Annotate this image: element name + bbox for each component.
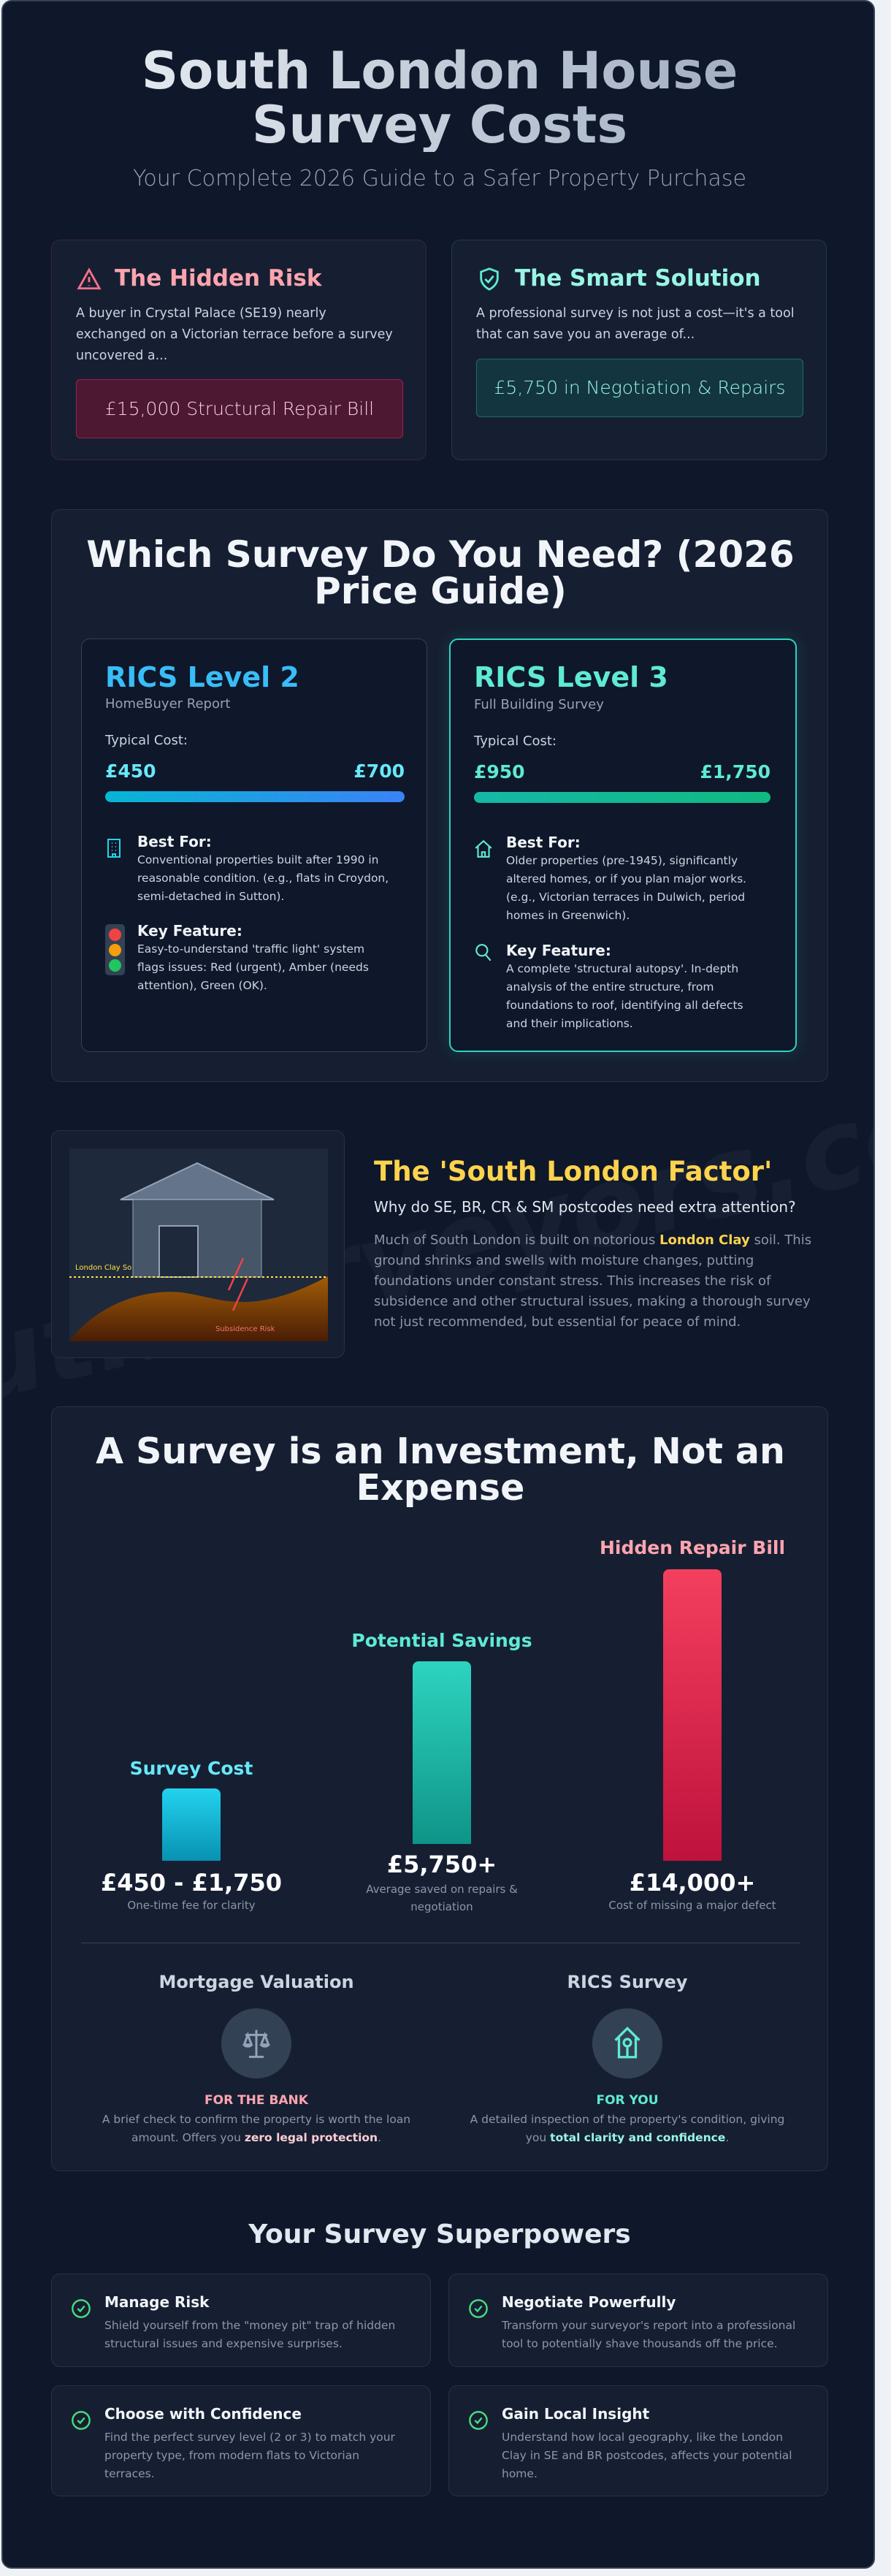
bar: hidden repair bill: £14,000+ [630, 1869, 755, 1897]
bar: survey cost [101, 1758, 282, 1912]
heading: investment [96, 1430, 785, 1509]
icon: house [475, 840, 492, 858]
bar: hidden repair bill: Hidden Repair Bill [600, 1537, 785, 1558]
illustration: house on clay: London Clay So [75, 1264, 131, 1272]
bar: survey cost: Survey Cost [130, 1758, 253, 1779]
icon: warning [77, 267, 101, 289]
callout: repair bill: £15,000 Structural Repair Bill [105, 398, 374, 419]
text: key feature: Key Feature: [137, 922, 242, 940]
text: question: Why do SE, BR, CR & SM postcodes need extra attention? [374, 1198, 796, 1216]
label: typical cost: Typical Cost: [105, 733, 188, 748]
subtitle: Your Complete 2026 Guide to a Safer Property Purchase [133, 166, 746, 191]
comparison: mortgage valuation: A brief check to confirm the property is worth the loan amount. Offers you zero legal protection. [102, 2113, 410, 2144]
card: local insight [448, 2385, 828, 2496]
card: RICS level 2 [81, 639, 427, 1052]
icon: shield [480, 267, 499, 291]
title [3, 44, 876, 152]
bar: survey cost: One-time fee for clarity [127, 1899, 256, 1912]
text: key feature: Key Feature: [506, 942, 611, 959]
prices: £700 [353, 761, 405, 782]
panel: illustration [51, 1130, 345, 1358]
bar: price range [474, 792, 770, 803]
callout: repair bill [76, 379, 403, 438]
icon: traffic light [105, 924, 125, 975]
prices [474, 761, 770, 782]
comparison: mortgage valuation: Mortgage Valuation [158, 1972, 354, 1992]
text: smart solution: A professional survey is not just a cost—it's a tool that can save you an average of... [476, 306, 795, 342]
heading: which survey: Price Guide) [314, 570, 567, 612]
card: negotiate: Negotiate Powerfully [502, 2293, 676, 2311]
comparison: mortgage valuation [102, 1972, 410, 2144]
card: manage risk: Manage Risk [104, 2293, 209, 2311]
label: typical cost: Typical Cost: [474, 733, 557, 749]
card: manage risk: Shield yourself from the "money pit" trap of hidden structural issues and expensive surprises. [104, 2319, 395, 2350]
text: best for: Conventional properties built after 1990 in reasonable condition. (e.g., flats in Croydon, semi-detached in Sutton). [137, 853, 389, 903]
card: RICS level 3 [449, 639, 797, 1052]
bar: price range [105, 791, 405, 802]
title: Survey Costs [252, 95, 627, 155]
comparison: RICS survey [470, 1972, 784, 2144]
heading: investment: A Survey is an Investment, Not an [96, 1430, 785, 1472]
comparison: RICS survey: A detailed inspection of the property's condition, giving you total clarity and confidence. [470, 2113, 784, 2144]
icon: house key [592, 2008, 662, 2078]
panel: investment [51, 1406, 828, 2171]
heading: south london factor: The 'South London Factor' [374, 1156, 772, 1187]
card: negotiate [448, 2274, 828, 2367]
illustration: house on clay: Subsidence Risk [215, 1325, 275, 1333]
prices: £1,750 [700, 761, 770, 782]
subtitle: level 2: HomeBuyer Report [105, 696, 230, 712]
panel: hidden risk [51, 240, 427, 460]
bar: hidden repair bill [600, 1537, 785, 1912]
heading: level 2: RICS Level 2 [105, 661, 299, 693]
text: key feature: A complete 'structural autopsy'. In-depth analysis of the entire structure, from foundations to roof, identifying all defects and their implications. [506, 962, 743, 1030]
text: best for: Older properties (pre-1945), significantly altered homes, or if you plan major works. (e.g., Victorian terraces in Dulwich, period homes in Greenwich). [506, 854, 746, 922]
card: manage risk [51, 2274, 431, 2367]
card: negotiate: Transform your surveyor's report into a professional tool to potentially shave thousands off the price. [502, 2319, 795, 2350]
card: choose: Choose with Confidence [104, 2405, 302, 2423]
heading: level 3: RICS Level 3 [474, 661, 668, 693]
text: hidden risk: A buyer in Crystal Palace (SE19) nearly exchanged on a Victorian terrace before a survey uncovered a... [76, 306, 393, 363]
heading: smart solution: The Smart Solution [515, 265, 761, 291]
comparison: RICS survey: RICS Survey [567, 1972, 687, 1992]
heading: investment: Expense [356, 1467, 524, 1509]
prices: £450 [105, 761, 156, 782]
card: choose [51, 2385, 431, 2496]
icon: building [107, 839, 121, 858]
heading: which survey: Which Survey Do You Need? (2026 [86, 533, 795, 576]
text: best for: Best For: [506, 834, 581, 851]
bar: potential savings: Average saved on repairs & negotiation [366, 1883, 518, 1913]
heading: which survey [86, 533, 795, 612]
icon: magnifier [475, 944, 491, 961]
card: local insight: Understand how local geography, like the London Clay in SE and BR postcodes, affects your potential home. [502, 2431, 792, 2480]
bar: hidden repair bill: Cost of missing a major defect [608, 1899, 776, 1912]
icon: scales [221, 2008, 291, 2078]
bar: survey cost: £450 - £1,750 [101, 1869, 282, 1897]
bar: potential savings: £5,750+ [387, 1851, 497, 1878]
heading: superpowers: Your Survey Superpowers [248, 2219, 631, 2249]
illustration: house on clay [69, 1148, 328, 1341]
prices [105, 761, 405, 782]
bar: potential savings [351, 1630, 532, 1913]
callout: savings: £5,750 in Negotiation & Repairs [494, 377, 785, 398]
card: choose: Find the perfect survey level (2 or 3) to match your property type, from modern flats to Victorian terraces. [104, 2431, 395, 2480]
panel: smart solution [451, 240, 827, 460]
text: key feature: Easy-to-understand 'traffic light' system flags issues: Red (urgent), Amber (needs attention), Green (OK). [137, 942, 369, 992]
text: explanation: Much of South London is built on notorious London Clay soil. This ground shrinks and swells with moisture changes, putting foundations under constant stress. This increases the risk of subsidence and other structural issues, making a thorough survey not just recommended, but essential for peace of mind. [374, 1232, 811, 1330]
heading: hidden risk: The Hidden Risk [115, 265, 321, 291]
comparison: RICS survey: FOR YOU [596, 2093, 659, 2108]
text: best for: Best For: [137, 833, 212, 850]
bar chart [101, 1537, 785, 1913]
card: local insight: Gain Local Insight [502, 2405, 649, 2423]
callout: savings [476, 359, 803, 417]
panel: which survey [51, 509, 828, 1082]
comparison: mortgage valuation: FOR THE BANK [204, 2093, 308, 2108]
title: South London House [142, 41, 738, 101]
prices: £950 [474, 761, 525, 782]
subtitle: level 3: Full Building Survey [474, 697, 604, 712]
bar: potential savings: Potential Savings [351, 1630, 532, 1651]
